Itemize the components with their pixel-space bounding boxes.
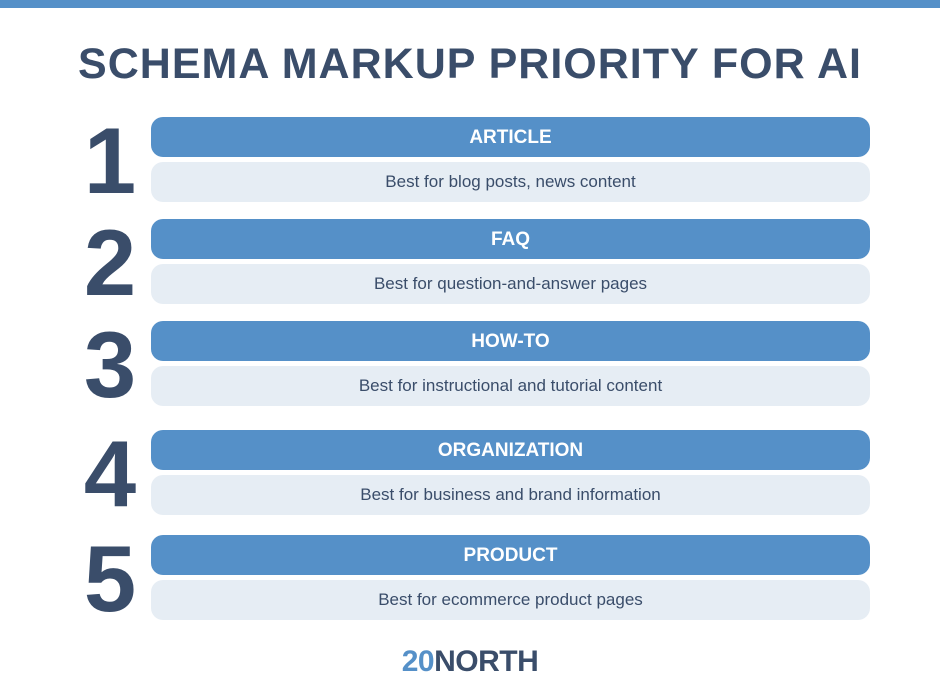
- heading product: PRODUCT: [464, 545, 557, 566]
- row 2: faq: [84, 210, 870, 315]
- number 3: 3: [84, 312, 136, 417]
- description faq: Best for question-and-answer pages: [374, 274, 647, 293]
- number 2: 2: [84, 210, 136, 315]
- number 4: 4: [84, 421, 136, 526]
- description how-to: [151, 366, 870, 406]
- description how-to: Best for instructional and tutorial content: [359, 376, 662, 395]
- heading faq: [151, 219, 870, 259]
- description article: Best for blog posts, news content: [385, 172, 636, 191]
- row 3: how-to: [84, 312, 870, 417]
- description product: [151, 580, 870, 620]
- heading how-to: [151, 321, 870, 361]
- number 5: 5: [84, 526, 136, 631]
- heading how-to: HOW-TO: [471, 331, 550, 352]
- description organization: [151, 475, 870, 515]
- description article: [151, 162, 870, 202]
- row 5: product: [84, 526, 870, 631]
- heading organization: ORGANIZATION: [438, 440, 583, 461]
- number 1: 1: [84, 108, 136, 213]
- heading product: [151, 535, 870, 575]
- description organization: Best for business and brand information: [360, 485, 661, 504]
- title: SCHEMA MARKUP PRIORITY FOR AI: [78, 40, 862, 88]
- heading article: ARTICLE: [469, 127, 552, 148]
- heading organization: [151, 430, 870, 470]
- logo: 20NORTH: [402, 645, 538, 678]
- heading article: [151, 117, 870, 157]
- row 4: organization: [84, 421, 870, 526]
- heading faq: FAQ: [491, 229, 530, 250]
- description product: Best for ecommerce product pages: [378, 590, 643, 609]
- row 1: article: [84, 108, 870, 213]
- description faq: [151, 264, 870, 304]
